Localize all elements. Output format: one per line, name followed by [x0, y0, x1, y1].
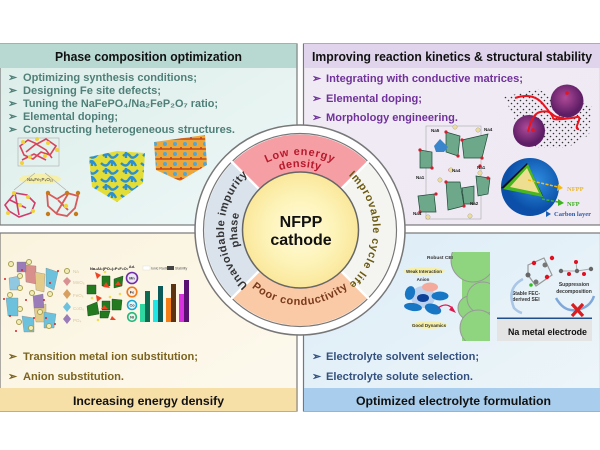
illustration: NFPP crystal structure: Na1 — [477, 165, 486, 170]
panel: phase composition optimization — [0, 44, 297, 225]
list: phase composition strategies: ➢ — [8, 124, 18, 136]
list: phase composition strategies: Optimizing synthesis conditions; — [23, 72, 197, 84]
list: phase composition strategies: ➢ — [8, 72, 18, 84]
caption: stable SEI: Stable FEC- — [512, 291, 540, 297]
caption: stable SEI: derived SEI — [512, 297, 540, 303]
list: energy density strategies: ➢ — [8, 351, 18, 363]
illustration: NFPP crystal structure — [413, 125, 493, 219]
list: phase composition strategies: Elemental doping; — [23, 111, 118, 123]
list: kinetics strategies: Elemental doping; — [326, 93, 422, 105]
list: phase composition strategies: ➢ — [8, 98, 18, 110]
list: energy density strategies: Anion substitution. — [23, 371, 124, 383]
list: electrolyte strategies: Electrolyte solute selection. — [326, 371, 473, 383]
legend: crystal polyhedra — [63, 268, 85, 324]
list: electrolyte strategies — [312, 351, 479, 383]
illustration: dopant circles: Ni — [130, 316, 134, 320]
illustration: dopant circles — [126, 264, 138, 321]
heading band: reaction kinetics: Improving reaction kinetics & structural stability — [312, 50, 592, 64]
list: electrolyte strategies: ➢ — [312, 371, 322, 383]
illustration: sodium solvation structure: Good Dynamics — [412, 323, 447, 328]
sector: unavoidable impurity phase — [205, 162, 259, 298]
list: phase composition strategies: Tuning the NaFePO₄/Na₂FeP₂O₇ ratio; — [23, 98, 218, 110]
illustration: dopant circles: Co — [129, 304, 135, 308]
legend: crystal polyhedra: FeO₆ — [73, 293, 84, 298]
illustration: dopant circles: Fe — [130, 290, 134, 294]
electrode: sodium metal — [497, 318, 592, 341]
sector: improvable cycle life — [341, 162, 395, 298]
label: NFP: NFP — [567, 201, 580, 208]
illustration: yellow and blue phase cube — [89, 151, 145, 202]
text: improvable cycle life: Improvable cycle life — [349, 170, 381, 287]
central ring diagram — [194, 124, 406, 336]
center circle — [242, 172, 358, 288]
list: kinetics strategies: ➢ — [312, 112, 322, 124]
panel: increasing energy density — [0, 233, 297, 411]
sector: poor conductivity — [232, 271, 368, 325]
label: carbon layer: Carbon layer — [554, 211, 591, 218]
list: kinetics strategies: Morphology engineering. — [326, 112, 458, 124]
illustration: NFPP crystal structure: Na4 — [452, 168, 461, 173]
list: kinetics strategies — [312, 73, 523, 124]
list: electrolyte strategies: ➢ — [312, 351, 322, 363]
text: poor conductivity: Poor conductivity — [252, 282, 346, 306]
list: electrolyte strategies: Electrolyte solvent selection; — [326, 351, 479, 363]
list: phase composition strategies: ➢ — [8, 85, 18, 97]
illustration: sodium solvation structure — [403, 267, 456, 329]
center label: cathode — [270, 232, 332, 249]
text: density: density — [279, 160, 322, 172]
illustration: green polyhedra structure: Na₄Al₂(PO₄)₂P₂F₂O₇ — [90, 266, 129, 271]
panel: optimized electrolyte formulation — [304, 233, 600, 411]
heading band: phase composition: Phase composition optimization — [55, 50, 242, 64]
legend: crystal polyhedra: PO₄ — [73, 318, 82, 323]
list: energy density strategies: ➢ — [8, 371, 18, 383]
heading band: electrolyte formulation: Optimized electrolyte formulation — [356, 394, 551, 408]
heading band: energy density — [0, 388, 296, 411]
heading band: phase composition — [0, 44, 296, 68]
illustration: sodium solvation structure: Weak Interaction — [406, 269, 442, 274]
illustration: core-shell sphere — [501, 158, 564, 217]
illustration: NFPP crystal structure: Na5 — [431, 128, 440, 133]
illustration: NFPP crystal structure: Na1 — [416, 175, 425, 180]
list: kinetics strategies: Integrating with conductive matrices; — [326, 73, 523, 85]
list: kinetics strategies: ➢ — [312, 93, 322, 105]
illustration: substituted crystal structure — [3, 260, 59, 332]
list: phase composition strategies: Constructing heterogeneous structures. — [23, 124, 235, 136]
panel: improving reaction kinetics and structural stability — [304, 44, 600, 225]
illustration: green polyhedra structure — [87, 266, 129, 321]
illustration: FEC molecule — [526, 256, 554, 287]
illustration: robust CEI cathode particles — [427, 252, 490, 341]
illustration: NFPP crystal structure: Na4 — [484, 127, 493, 132]
list: kinetics strategies: ➢ — [312, 73, 322, 85]
list: phase composition strategies: Designing Fe site defects; — [23, 85, 161, 97]
bar chart: ionic radii and stability — [140, 266, 189, 322]
icon: red cross — [572, 304, 583, 316]
center label: NFPP — [280, 214, 323, 231]
legend: crystal polyhedra: Na — [73, 269, 79, 274]
heading band: energy density: Increasing energy densify — [73, 394, 224, 408]
electrode: sodium metal: Na metal electrode — [508, 327, 587, 337]
illustration: robust CEI cathode particles: Robust CEI — [427, 255, 454, 261]
list: energy density strategies — [8, 351, 198, 383]
illustration: NFPP crystal structure: Na2 — [470, 201, 479, 206]
caption: suppression decomposition: Suppression — [559, 282, 589, 288]
sector: low energy density — [232, 135, 368, 189]
text: low energy: Low energy — [264, 149, 335, 163]
illustration: phase crystal structures: Na₄Fe₃P₄O₁₅ — [27, 177, 53, 182]
legend: crystal polyhedra: CoO₆ — [73, 306, 84, 311]
list: energy density strategies: Transition metal ion substitution; — [23, 351, 198, 363]
illustration: phase crystal structures — [5, 137, 80, 217]
legend: crystal polyhedra: MnO₆ — [73, 280, 85, 285]
list: phase composition strategies: ➢ — [8, 111, 18, 123]
illustration: conductive carbon matrix with particles — [504, 84, 592, 148]
text: unavoidable impurity: Unavoidable impurity — [216, 171, 246, 290]
caption: suppression decomposition: decomposition — [556, 289, 592, 295]
bar chart: ionic radii and stability: Stability — [175, 266, 188, 270]
illustration: carbonate molecule — [559, 260, 593, 276]
heading band: reaction kinetics — [304, 44, 600, 68]
text: phase: phase — [230, 213, 242, 248]
label: NFPP: NFPP — [567, 186, 584, 193]
list: phase composition strategies — [8, 72, 235, 136]
arrows: SEI and suppression — [511, 279, 594, 313]
illustration: NFPP crystal structure: Na4 — [413, 211, 422, 216]
illustration: dopant circles: Ad. — [129, 264, 135, 269]
illustration: layered orange and blue cube — [154, 135, 207, 181]
illustration: sodium solvation structure: Anion — [417, 277, 430, 282]
illustration: dopant circles: Mn — [129, 276, 135, 280]
bar chart: ionic radii and stability: Ionic Radii — [151, 266, 168, 270]
heading band: electrolyte formulation — [304, 388, 600, 411]
